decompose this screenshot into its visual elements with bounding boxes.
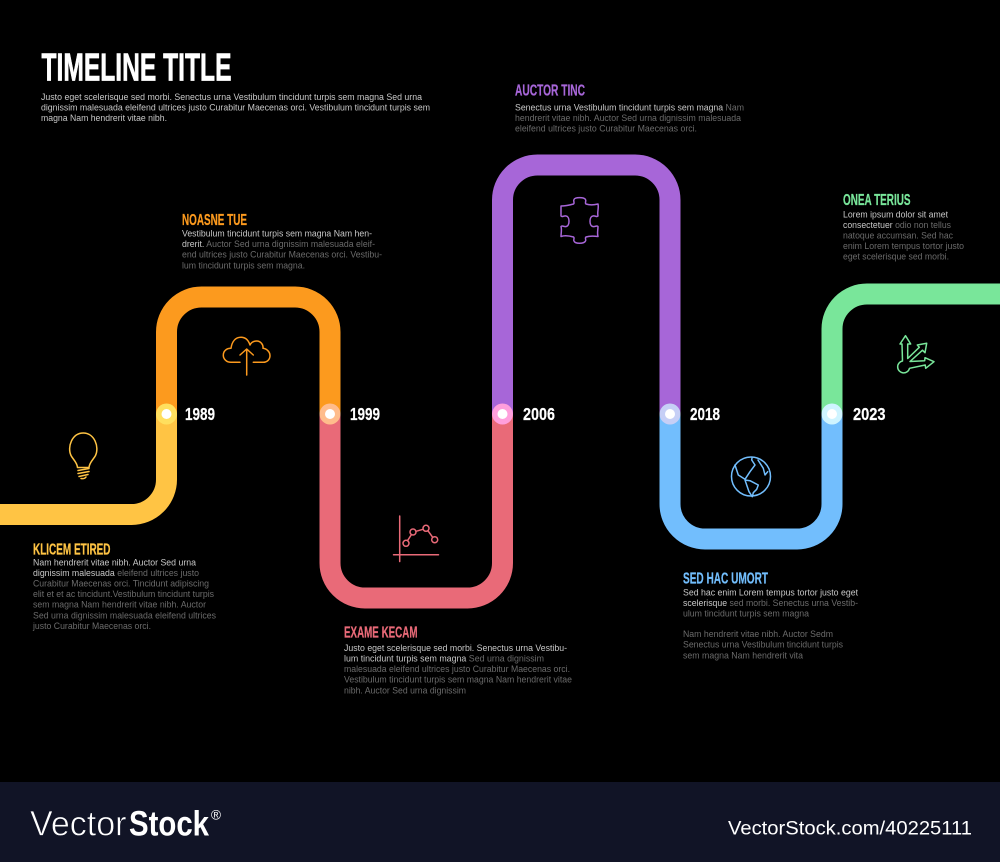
description: end ultrices justo Curabitur Maecenas orci. Vestibu- (182, 250, 382, 260)
description: drerit. Auctor Sed urna dignissim malesuada eleif- (182, 239, 375, 249)
description (683, 587, 859, 660)
description (843, 210, 964, 262)
road segment: blue (670, 414, 832, 539)
description: ulum tincidunt turpis sem magna (683, 608, 809, 618)
road segment: orange (166, 297, 330, 414)
description: Curabitur Maecenas orci. Tincidunt adipiscing (33, 578, 209, 588)
heading: NOASNE TUE (182, 212, 247, 229)
description: consectetuer odio non tellus (843, 220, 952, 230)
heading: KLICEM ETIRED (33, 542, 110, 558)
year 1989: 1989 (185, 404, 215, 424)
description: natoque accumsan. Sed hac (843, 230, 954, 240)
heading: AUCTOR TINC (515, 83, 585, 100)
logo: ® (211, 808, 221, 822)
description (182, 228, 382, 270)
marker 2006 (492, 404, 513, 424)
description: scelerisque sed morbi. Senectus urna Vestib- (683, 598, 858, 608)
description: sem magna Nam hendrerit vitae nibh. Auctor (33, 600, 206, 610)
description: justo Curabitur Maecenas orci. (32, 621, 151, 631)
description: sem magna Nam hendrerit vita (683, 650, 803, 660)
intro text: magna Nam hendrerit vitae nibh. (41, 113, 167, 123)
description: Sed hac enim Lorem tempus tortor justo eget (683, 587, 859, 597)
marker 2018 (660, 404, 680, 424)
description: Vestibulum tincidunt turpis sem magna Nam hen- (182, 228, 372, 238)
road segment: green (832, 294, 1000, 414)
icon: diverging arrows (898, 336, 934, 373)
year 2006: 2006 (523, 404, 555, 424)
description: elit et et ac tincidunt.Vestibulum tincidunt turpis (33, 589, 215, 599)
description: eget scelerisque sed morbi. (843, 252, 949, 262)
winding timeline road (0, 165, 1000, 598)
road segment: yellow (0, 414, 166, 514)
description: lum tincidunt turpis sem magna Sed urna dignissim (344, 654, 544, 664)
marker 1999 (320, 404, 340, 424)
intro text (41, 92, 430, 123)
description: lum tincidunt turpis sem magna. (182, 260, 305, 270)
heading: ONEA TERIUS (843, 192, 911, 209)
milestone: Noasne Tue (182, 212, 382, 270)
description: Senectus urna Vestibulum tincidunt turpis sem magna Nam (515, 103, 744, 113)
description: Nam hendrerit vitae nibh. Auctor Sedm (683, 629, 833, 639)
description: Justo eget scelerisque sed morbi. Senectus urna Vestibu- (344, 643, 567, 653)
marker 2023 (822, 404, 842, 424)
year 1999: 1999 (350, 404, 380, 424)
description: enim Lorem tempus tortor justo (843, 241, 964, 251)
logo: Vector (30, 805, 127, 844)
title: TIMELINE TITLE (42, 46, 231, 90)
road segment: red (330, 414, 502, 598)
road segment: purple (502, 165, 670, 414)
description: malesuada eleifend ultrices justo Curabitur Maecenas orci. (344, 664, 570, 674)
intro text: dignissim malesuada eleifend ultrices justo Curabitur Maecenas orci. Vestibulum tincidunt turpis sem (41, 102, 430, 112)
description: hendrerit vitae nibh. Auctor Sed urna dignissim malesuada (515, 113, 741, 123)
image id: VectorStock.com/40225111 (728, 818, 972, 840)
marker 1989 (156, 404, 177, 424)
description: Senectus urna Vestibulum tincidunt turpis (683, 640, 844, 650)
icon: globe (732, 457, 770, 497)
year 2023: 2023 (853, 404, 886, 424)
footer bar (0, 782, 1000, 862)
icon: puzzle piece (561, 198, 598, 243)
logo: Stock (129, 805, 209, 844)
description: dignissim malesuada eleifend ultrices justo (33, 568, 199, 578)
milestone: Auctor Tinc (515, 83, 744, 134)
description (344, 643, 572, 696)
description: Nam hendrerit vitae nibh. Auctor Sed urna (33, 558, 196, 568)
description: nibh. Auctor Sed urna dignissim (344, 686, 466, 696)
intro text: Justo eget scelerisque sed morbi. Senectus urna Vestibulum tincidunt turpis sem magna Sed urna (41, 92, 422, 102)
milestone: Klicem Etired (32, 542, 217, 631)
heading: SED HAC UMORT (683, 570, 768, 587)
icon: light bulb (70, 433, 97, 479)
icon: line chart (394, 516, 438, 562)
icon: cloud upload (223, 337, 270, 375)
milestone: Onea Terius (843, 192, 964, 262)
description: eleifend ultrices justo Curabitur Maecenas orci. (515, 124, 697, 134)
description: Vestibulum tincidunt turpis sem magna Nam hendrerit vitae (344, 674, 572, 684)
milestone: Exame Kecam (344, 625, 572, 696)
heading: EXAME KECAM (344, 625, 418, 642)
milestone: Sed Hac Umort (683, 570, 859, 660)
description: Sed urna dignissim malesuada eleifend ultrices (33, 610, 217, 620)
year 2018: 2018 (690, 404, 720, 424)
description (32, 558, 217, 631)
description: Lorem ipsum dolor sit amet (843, 210, 949, 220)
logo (30, 805, 221, 844)
description (515, 103, 744, 134)
